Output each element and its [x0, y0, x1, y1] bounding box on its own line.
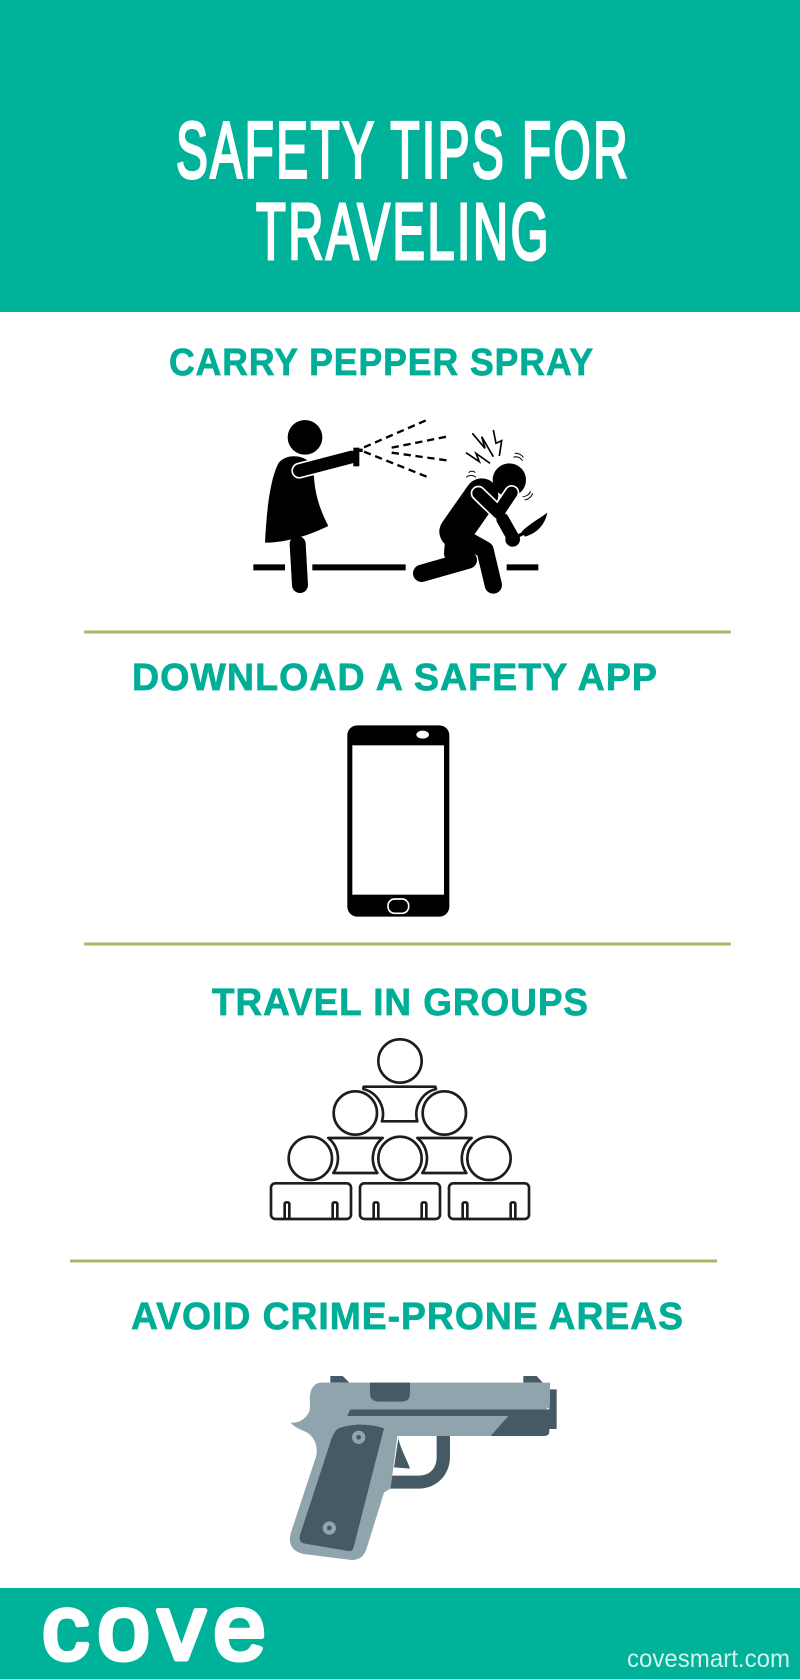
divider: [84, 942, 731, 946]
icon: woman pepper-spraying attacker: [253, 419, 547, 585]
title: [176, 106, 630, 276]
icon: handgun: [290, 1376, 557, 1560]
website url: covesmart.com: [627, 1645, 790, 1673]
header band: [0, 0, 800, 312]
icon: smartphone: [347, 725, 449, 917]
footer band: [0, 1577, 800, 1679]
title: TRAVELING: [256, 187, 551, 276]
logo: cove: cove: [42, 1577, 274, 1679]
icon: group of people: [271, 1039, 529, 1219]
heading: download a safety app: DOWNLOAD A SAFETY APP: [132, 657, 658, 699]
divider: [84, 630, 731, 634]
heading: carry pepper spray: CARRY PEPPER SPRAY: [169, 342, 594, 384]
heading: travel in groups: TRAVEL IN GROUPS: [212, 982, 589, 1024]
heading: avoid crime-prone areas: AVOID CRIME-PRONE AREAS: [131, 1296, 684, 1338]
divider: [70, 1260, 717, 1262]
